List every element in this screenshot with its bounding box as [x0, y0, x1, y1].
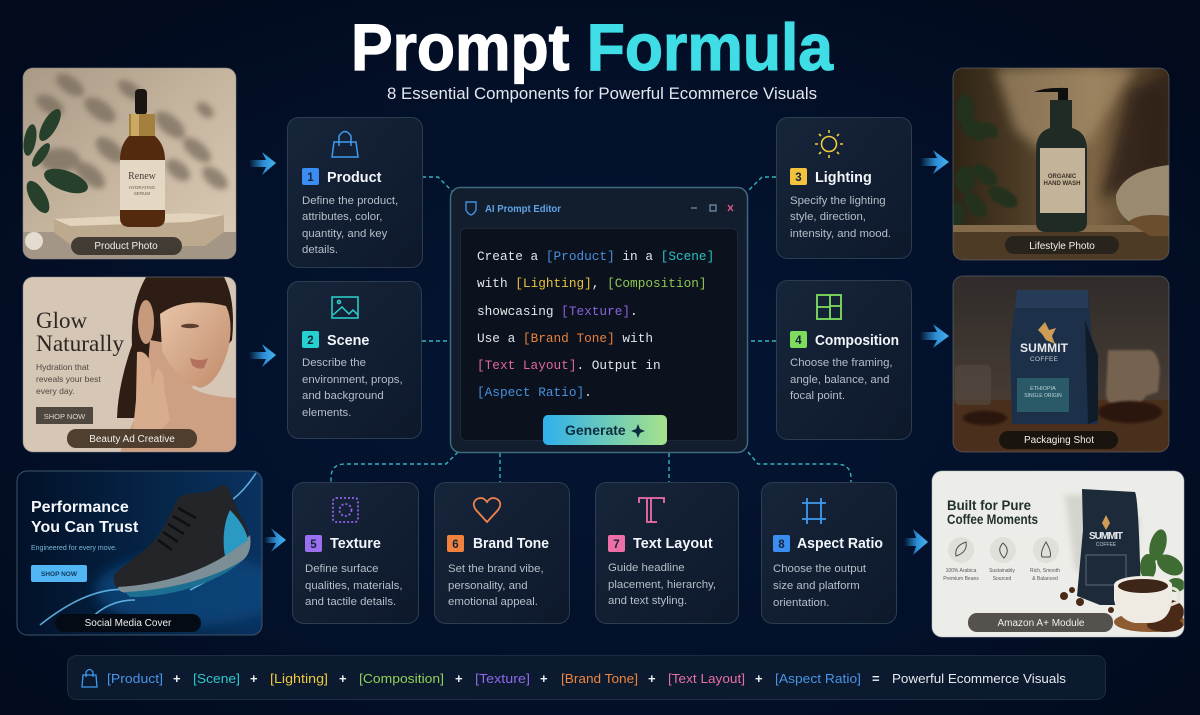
badge 8: 8 — [778, 539, 785, 551]
photo: amazon a+ module: COFFEE — [1096, 542, 1117, 548]
photo: social media cover: Engineered for every move. — [31, 545, 117, 552]
photo: lifestyle photo: Lifestyle Photo — [1029, 241, 1095, 252]
badge 7 — [608, 535, 625, 552]
card 2: scene — [288, 282, 422, 438]
card 1: product: Define the product, — [302, 195, 398, 207]
arrow: product photo to card 1 — [249, 152, 276, 175]
photo: product photo: SERUM — [134, 191, 150, 196]
photo: packaging shot: COFFEE — [1030, 356, 1059, 363]
prompt text: Use a [Brand Tone] with — [477, 331, 653, 346]
photo: amazon a+ module: & Balanced — [1032, 576, 1058, 582]
photo: social media cover: SHOP NOW — [41, 571, 78, 578]
prompt text — [477, 249, 714, 400]
photo: beauty ad creative: reveals your best — [36, 374, 101, 384]
photo: social media cover: Social Media Cover — [85, 618, 172, 629]
formula bar: [Composition] — [359, 671, 444, 686]
photo: social media cover: Performance — [31, 499, 129, 516]
card 5: texture: Define surface — [305, 563, 378, 575]
photo: product photo: Renew — [128, 171, 157, 182]
photo frame: social cover — [17, 471, 262, 635]
formula bar: [Brand Tone] — [561, 671, 638, 686]
card 8: aspect ratio — [762, 482, 896, 624]
formula bar: + — [755, 671, 763, 686]
badge 8 — [773, 535, 790, 552]
badge 7: 7 — [613, 539, 620, 551]
photo: product photo: HYDRATING — [129, 185, 156, 190]
formula bar: [Aspect Ratio] — [775, 671, 861, 686]
photo: product photo: Product Photo — [94, 241, 158, 252]
card 7: text layout: Guide headline — [608, 562, 685, 574]
card 6: brand tone: Set the brand vibe, — [448, 563, 544, 575]
photo: packaging shot: ETHIOPIA — [1030, 386, 1056, 392]
card 5: texture — [292, 482, 418, 624]
photo: beauty ad creative — [23, 277, 236, 452]
card 5: texture: qualities, materials, — [305, 580, 402, 592]
photo: beauty ad creative: Naturally — [36, 331, 125, 356]
card 1: product — [288, 118, 422, 268]
badge 3: 3 — [795, 172, 802, 184]
formula bar: [Texture] — [475, 671, 530, 686]
badge 6 — [447, 535, 464, 552]
panel: ai prompt editor: AI Prompt Editor — [485, 204, 561, 215]
photo: beauty ad creative: Beauty Ad Creative — [89, 434, 175, 445]
badge 2 — [302, 331, 319, 348]
photo: amazon a+ module: Coffee Moments — [947, 512, 1038, 527]
prompt text: showcasing [Texture]. — [477, 304, 638, 319]
photo: social media cover — [20, 472, 262, 634]
arrow: card 3 to lifestyle — [920, 150, 949, 174]
icon: crop frame — [802, 498, 826, 524]
photo: product photo — [21, 68, 236, 259]
photo: lifestyle photo: ORGANIC — [1048, 174, 1077, 180]
card 4: composition: Choose the framing, — [790, 357, 893, 369]
card 3: lighting: style, direction, — [790, 211, 866, 223]
formula bar: = — [872, 671, 880, 686]
badge 1: 1 — [307, 172, 314, 184]
prompt text: [Text Layout]. Output in — [477, 358, 661, 373]
arrow: card 4 to packaging — [920, 324, 949, 348]
photo frame: lifestyle — [953, 68, 1169, 260]
badge 5 — [305, 535, 322, 552]
photo: beauty ad creative: Hydration that — [36, 362, 90, 372]
photo: amazon a+ module: Rich, Smooth — [1030, 568, 1060, 574]
prompt text: with [Lighting], [Composition] — [477, 276, 707, 291]
card 8: aspect ratio: Aspect Ratio — [797, 536, 883, 552]
card 5: texture: and tactile details. — [305, 596, 396, 608]
photo: packaging shot: Packaging Shot — [1024, 435, 1094, 446]
photo: packaging shot: SINGLE ORIGIN — [1024, 393, 1062, 399]
photo frame: beauty ad — [23, 277, 236, 452]
generate button — [543, 415, 667, 445]
formula bar: [Lighting] — [270, 671, 328, 686]
arrow: beauty ad to card 2 — [249, 344, 276, 367]
formula bar: + — [339, 671, 347, 686]
card 2: scene: Scene — [327, 333, 369, 349]
title: Prompt Formula — [351, 10, 834, 84]
generate button: Generate — [565, 422, 626, 438]
arrow: social cover to card 5 — [264, 528, 286, 552]
prompt text: [Aspect Ratio]. — [477, 385, 592, 400]
photo: lifestyle photo: HAND WASH — [1044, 181, 1080, 187]
formula bar: + — [173, 671, 181, 686]
icon: letter T — [639, 498, 664, 522]
photo frame: packaging — [953, 276, 1169, 452]
icon: composition grid — [817, 295, 841, 319]
card 6: brand tone — [434, 482, 570, 624]
icon: shield — [466, 202, 476, 215]
card 6: brand tone: Brand Tone — [473, 536, 549, 552]
photo: amazon a+ module: 100% Arabica — [946, 568, 977, 574]
photo: amazon a+ module: SUMMIT — [1089, 531, 1123, 542]
card 2: scene: and background — [302, 390, 384, 402]
photo: beauty ad creative: Glow — [36, 308, 88, 333]
formula bar — [68, 656, 1106, 700]
panel: ai prompt editor — [450, 188, 748, 452]
formula bar: + — [648, 671, 656, 686]
card 3: lighting: Specify the lighting — [790, 195, 886, 207]
badge 6: 6 — [452, 539, 459, 551]
formula bar: [Scene] — [193, 671, 240, 686]
card 6: brand tone: emotional appeal. — [448, 596, 538, 608]
icon: heart — [474, 498, 500, 522]
arrow: card 8 to amazon — [904, 529, 928, 555]
card 7: text layout: Text Layout — [633, 536, 713, 552]
formula bar: + — [540, 671, 548, 686]
card 2: scene: Describe the — [302, 357, 366, 369]
badge 3 — [790, 168, 807, 185]
card 7: text layout — [596, 482, 738, 624]
badge 5: 5 — [310, 539, 317, 551]
formula bar: [Text Layout] — [668, 671, 745, 686]
card 4: composition: Composition — [815, 333, 899, 349]
card 1: product: quantity, and key — [302, 228, 388, 240]
icon: sun — [815, 130, 843, 158]
formula bar: + — [250, 671, 258, 686]
photo: amazon a+ module: Sourced — [993, 576, 1012, 582]
card 1: product: attributes, color, — [302, 211, 382, 223]
photo frame: product photo — [23, 68, 236, 259]
icon: landscape image — [332, 297, 358, 318]
card 7: text layout: placement, hierarchy, — [608, 579, 716, 591]
badge 4: 4 — [795, 335, 802, 347]
card 4: composition: angle, balance, and — [790, 374, 889, 386]
photo: amazon a+ module: Amazon A+ Module — [998, 618, 1085, 629]
photo: amazon a+ module: Built for Pure — [947, 498, 1031, 513]
prompt text: Create a [Product] in a [Scene] — [477, 249, 714, 264]
card 4: composition: focal point. — [790, 390, 845, 402]
photo: social media cover: You Can Trust — [31, 519, 139, 536]
card 8: aspect ratio: Choose the output — [773, 563, 867, 575]
badge 4 — [790, 331, 807, 348]
card 2: scene: elements. — [302, 407, 351, 419]
photo: beauty ad creative: every day. — [36, 386, 75, 396]
icon: bag — [82, 670, 97, 687]
card 3: lighting: intensity, and mood. — [790, 228, 891, 240]
card 8: aspect ratio: size and platform — [773, 580, 860, 592]
photo frame: amazon — [932, 471, 1184, 637]
photo: amazon a+ module: Sustainably — [989, 568, 1015, 574]
photo: lifestyle photo — [951, 68, 1169, 260]
card 4: composition — [776, 280, 912, 440]
window controls — [691, 205, 733, 211]
photo: packaging shot: SUMMIT — [1020, 341, 1069, 355]
icon: shopping bag — [332, 132, 358, 157]
formula bar: Powerful Ecommerce Visuals — [892, 671, 1067, 686]
photo: beauty ad creative: SHOP NOW — [44, 412, 86, 421]
card 8: aspect ratio: orientation. — [773, 597, 829, 609]
photo: packaging shot — [953, 276, 1169, 452]
card 3: lighting: Lighting — [815, 170, 872, 186]
badge 2: 2 — [307, 335, 314, 347]
card 2: scene: environment, props, — [302, 374, 403, 386]
icon: texture — [333, 498, 358, 522]
photo: amazon a+ module — [932, 471, 1187, 637]
formula bar: [Product] — [107, 671, 163, 686]
subtitle: 8 Essential Components for Powerful Ecommerce Visuals — [387, 84, 817, 103]
formula bar: + — [455, 671, 463, 686]
card 5: texture: Texture — [330, 536, 381, 552]
card 3: lighting — [776, 118, 912, 258]
card 1: product: details. — [302, 244, 338, 256]
badge 1 — [302, 168, 319, 185]
photo: amazon a+ module: Premium Beans — [943, 576, 979, 582]
card 7: text layout: and text styling. — [608, 595, 687, 607]
card 1: product: Product — [327, 170, 382, 186]
dashed connectors — [331, 177, 851, 482]
card 6: brand tone: personality, and — [448, 580, 528, 592]
